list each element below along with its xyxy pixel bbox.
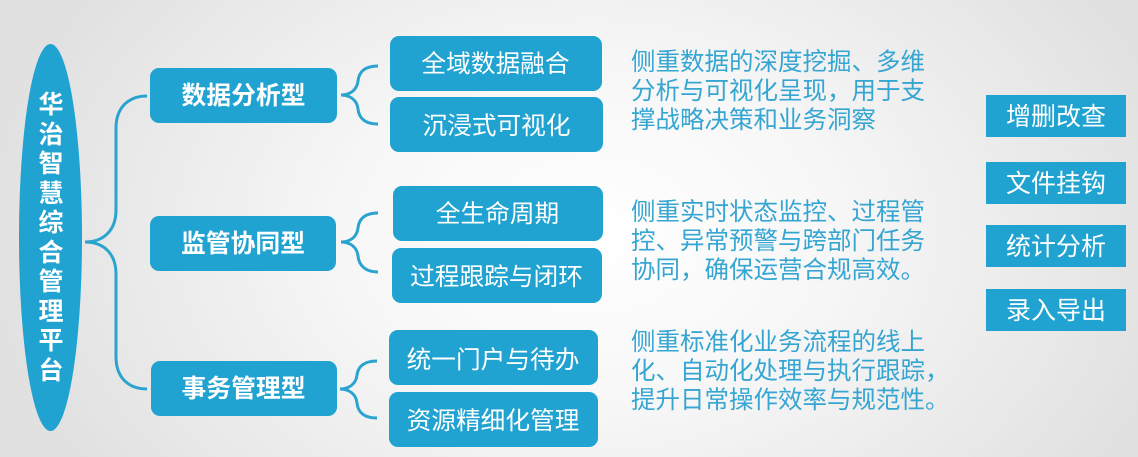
description: data analysis: 撑战略决策和业务洞察 xyxy=(631,106,876,134)
item: 全生命周期: 全生命周期 xyxy=(436,200,559,228)
description: affairs xyxy=(631,328,950,414)
function tag: 录入导出: 录入导出 xyxy=(1006,297,1106,325)
category: 监管协同型 xyxy=(150,216,336,271)
function tag: 增删改查 xyxy=(986,95,1126,137)
description: affairs: 化、自动化处理与执行跟踪， xyxy=(631,357,950,385)
item: 沉浸式可视化 xyxy=(390,97,603,152)
item: 全域数据融合 xyxy=(390,36,602,91)
root node: platform ellipse: 华 xyxy=(38,91,64,119)
root node: platform ellipse: 台 xyxy=(38,356,64,385)
root node: platform ellipse: 合 xyxy=(38,239,64,267)
description: supervision: 协同，确保运营合规高效。 xyxy=(631,256,925,284)
description: data analysis: 分析与可视化呈现，用于支 xyxy=(631,77,925,105)
description: data analysis xyxy=(631,48,925,134)
item: 统一门户与待办: 统一门户与待办 xyxy=(407,346,579,374)
category: 数据分析型 xyxy=(150,68,337,123)
item: 资源精细化管理: 资源精细化管理 xyxy=(407,407,579,435)
function tag: 统计分析 xyxy=(986,225,1126,267)
bracket: affairs xyxy=(340,361,377,418)
function tag: 文件挂钩: 文件挂钩 xyxy=(1006,170,1106,198)
description: supervision: 控、异常预警与跨部门任务 xyxy=(631,227,925,255)
root node: platform ellipse: 理 xyxy=(38,298,64,326)
description: supervision: 侧重实时状态监控、过程管 xyxy=(631,198,925,226)
description: affairs: 提升日常操作效率与规范性。 xyxy=(631,386,950,414)
item: 过程跟踪与闭环: 过程跟踪与闭环 xyxy=(410,263,583,291)
root node: platform ellipse xyxy=(19,44,82,431)
function tag: 统计分析: 统计分析 xyxy=(1006,233,1106,261)
root node: platform ellipse: 平 xyxy=(38,327,64,355)
category: 监管协同型: 监管协同型 xyxy=(181,230,305,258)
bracket: supervision xyxy=(341,213,378,272)
function tag: 文件挂钩 xyxy=(986,162,1126,204)
item: 全域数据融合: 全域数据融合 xyxy=(421,50,570,78)
bracket: data analysis xyxy=(341,66,378,124)
category: 事务管理型: 事务管理型 xyxy=(182,375,306,403)
description: supervision xyxy=(631,198,925,284)
function tag: 录入导出 xyxy=(986,289,1126,331)
item: 全生命周期 xyxy=(393,186,603,241)
root node: platform ellipse: 管 xyxy=(38,268,64,296)
description: data analysis: 侧重数据的深度挖掘、多维 xyxy=(631,48,925,76)
item: 沉浸式可视化: 沉浸式可视化 xyxy=(422,112,571,140)
description: affairs: 侧重标准化业务流程的线上 xyxy=(631,328,925,356)
main bracket xyxy=(85,96,147,389)
root node: platform ellipse: 治 xyxy=(38,121,64,149)
root node: platform ellipse: 综 xyxy=(38,209,64,237)
item: 过程跟踪与闭环 xyxy=(392,248,602,303)
function tag: 增删改查: 增删改查 xyxy=(1006,103,1106,131)
category: 事务管理型 xyxy=(151,361,337,416)
item: 统一门户与待办 xyxy=(389,330,598,385)
root node: platform ellipse: 慧 xyxy=(38,180,64,208)
category: 数据分析型: 数据分析型 xyxy=(182,82,306,110)
item: 资源精细化管理 xyxy=(389,392,598,447)
root node: platform ellipse: 智 xyxy=(38,150,64,178)
